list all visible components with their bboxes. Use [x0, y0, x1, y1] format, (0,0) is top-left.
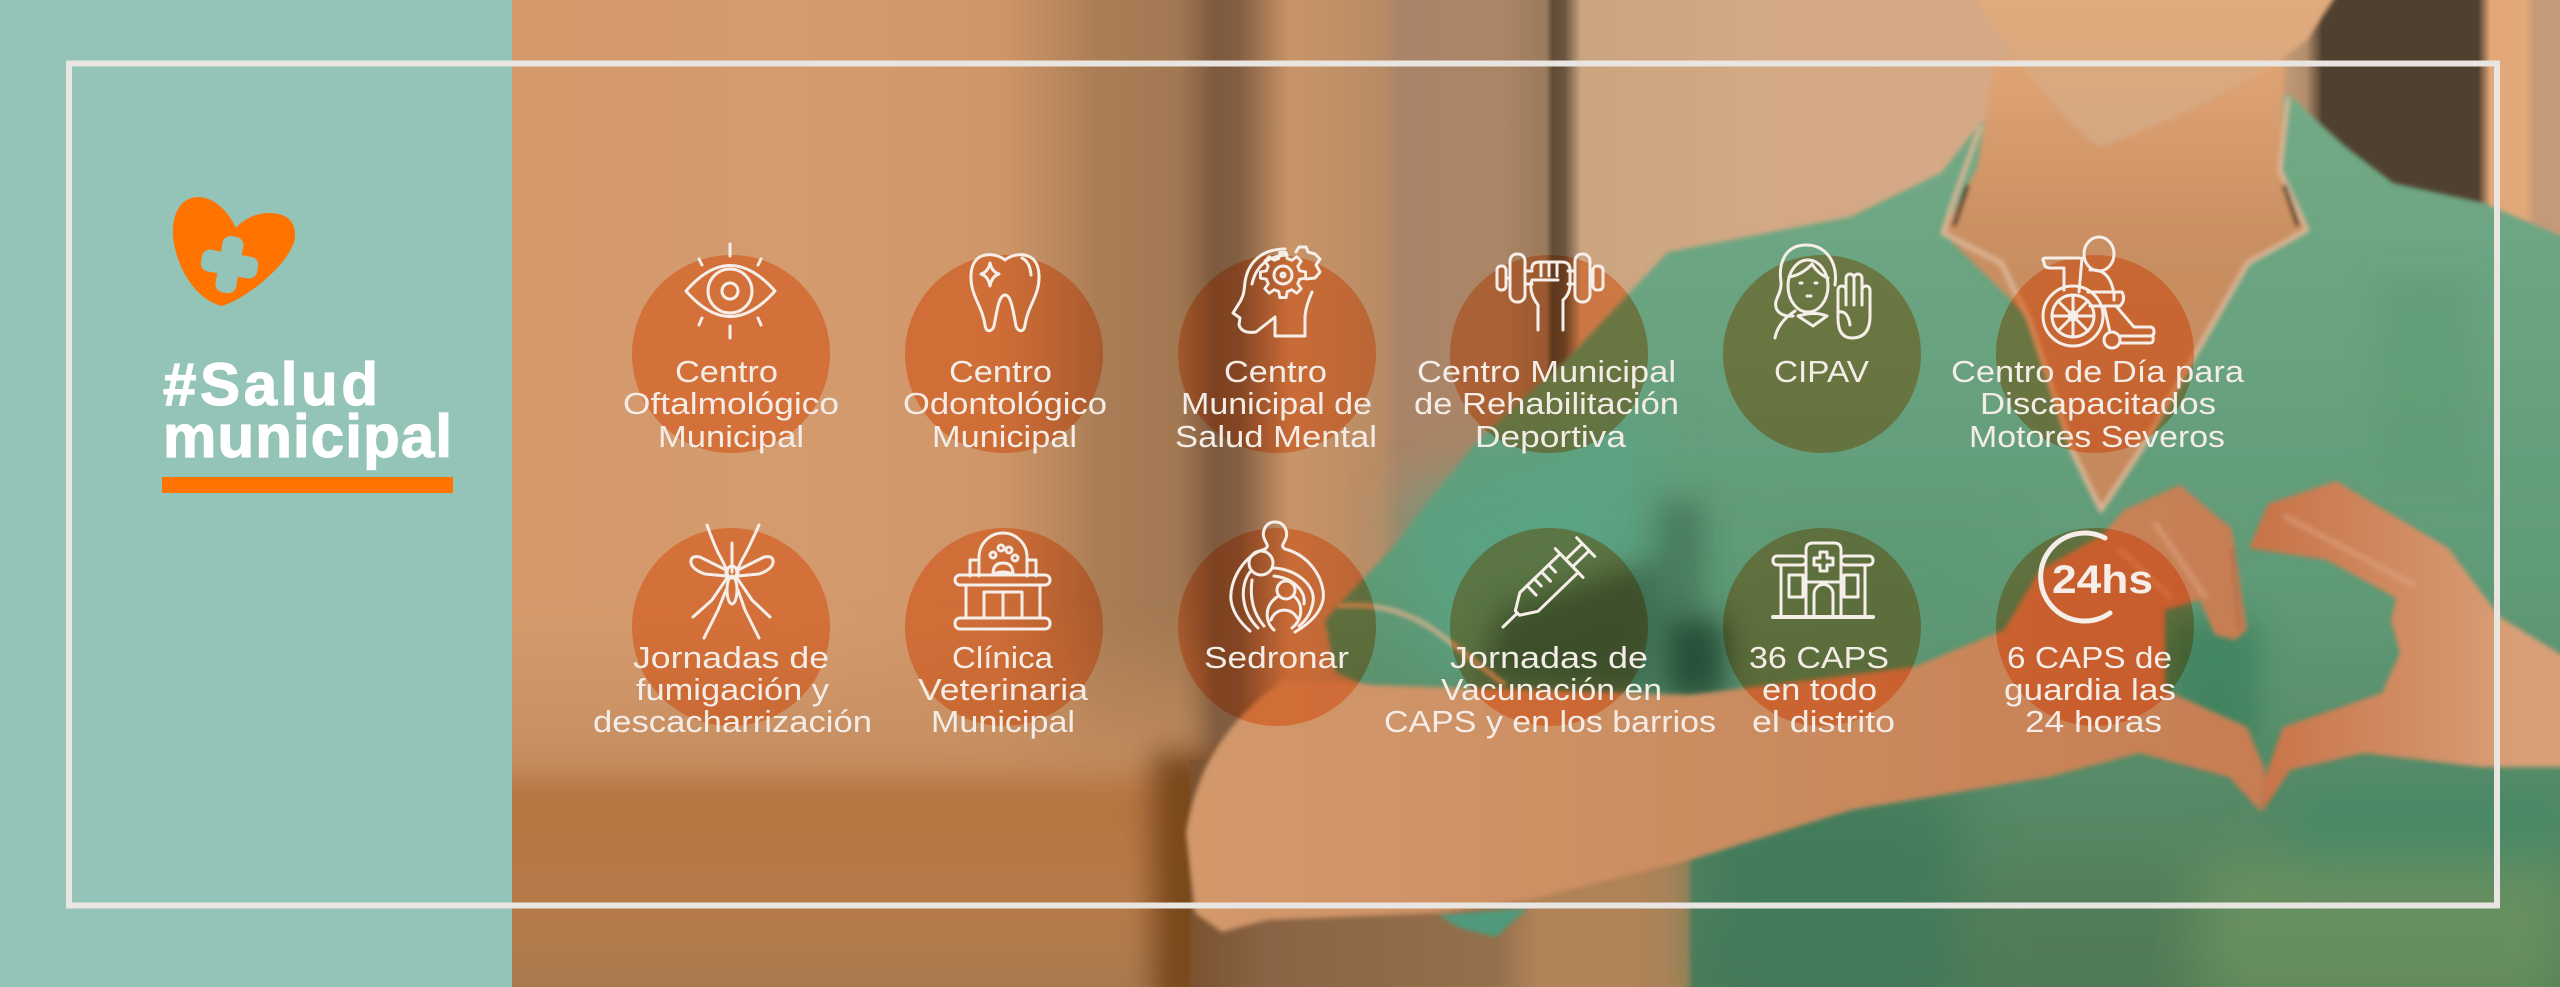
label: Municipal	[658, 419, 804, 454]
title: municipal	[163, 403, 452, 470]
icon: syringe	[1489, 533, 1600, 641]
label: Municipal	[931, 704, 1075, 739]
label: Odontológico	[903, 386, 1107, 421]
label: Municipal	[932, 419, 1077, 454]
title	[163, 351, 452, 470]
item: Centro Municipal de Rehabilitación Deportiva	[1414, 254, 1679, 454]
label: guardia las	[2004, 672, 2176, 707]
label	[1384, 640, 1716, 739]
label: de Rehabilitación	[1414, 386, 1679, 421]
item: Clínica Veterinaria Municipal	[918, 533, 1089, 739]
item: Centro Odontológico Municipal	[903, 255, 1107, 454]
collar piping	[1943, 97, 2307, 510]
label: Centro de Día para	[1951, 354, 2245, 389]
label	[1414, 354, 1679, 454]
icon: eye	[686, 244, 775, 338]
title: #Salud	[163, 351, 378, 418]
mask	[1970, 0, 2340, 147]
item: Jornadas de Vacunación en CAPS y en los barrios	[1384, 533, 1716, 739]
label: CIPAV	[1774, 354, 1869, 389]
icon: mosquito	[691, 525, 773, 638]
icon: hospital	[1773, 543, 1873, 617]
icon: 24hs clock ring	[2041, 533, 2153, 621]
left arm and hand	[1186, 485, 2265, 932]
label: 24 horas	[2025, 704, 2162, 739]
scrubs	[1325, 95, 2560, 987]
label: Centro	[675, 354, 778, 389]
item: Centro de Día para Discapacitados Motores Severos	[1951, 237, 2245, 454]
item: Jornadas de fumigación y descacharrización	[593, 525, 872, 739]
scrub folds and shading	[1400, 420, 2560, 987]
hem fragment	[1438, 908, 1528, 937]
item: Centro Municipal de Salud Mental	[1175, 247, 1377, 454]
title underline	[162, 477, 453, 493]
circles: translucent orange discs behind each service	[632, 255, 2194, 726]
label	[1951, 354, 2245, 454]
icon: person in wheelchair	[2043, 237, 2154, 348]
icon: tooth	[971, 255, 1039, 331]
label: Discapacitados	[1980, 386, 2216, 421]
label: Municipal de	[1181, 386, 1372, 421]
label: el distrito	[1752, 704, 1895, 739]
label: Jornadas de	[1450, 640, 1648, 675]
item: CIPAV	[1774, 245, 1870, 389]
icon: head with gears	[1233, 247, 1320, 336]
label: CAPS y en los barrios	[1384, 704, 1716, 739]
label: Centro	[949, 354, 1052, 389]
label: Oftalmológico	[623, 386, 839, 421]
label: en todo	[1762, 672, 1877, 707]
icon: veterinary clinic with paw	[955, 533, 1050, 629]
icon: woman with raised hand	[1775, 245, 1870, 338]
label	[623, 354, 839, 454]
label: Sedronar	[1204, 640, 1349, 675]
icon: fist with dumbbell	[1497, 254, 1603, 330]
label: Centro Municipal	[1417, 354, 1676, 389]
label	[2004, 640, 2176, 739]
item: Centro Oftalmológico Municipal	[623, 244, 839, 454]
label: Salud Mental	[1175, 419, 1377, 454]
label: 36 CAPS	[1749, 640, 1889, 675]
label: 6 CAPS de	[2007, 640, 2172, 675]
right hand	[2249, 481, 2560, 812]
label: fumigación y	[636, 672, 830, 707]
label	[1749, 640, 1895, 739]
label: Motores Severos	[1969, 419, 2225, 454]
item: Sedronar	[1204, 522, 1349, 675]
label: Deportiva	[1475, 419, 1627, 454]
label: descacharrización	[593, 704, 872, 739]
item: 6 CAPS de guardia las 24 horas	[2004, 533, 2176, 739]
label	[903, 354, 1107, 454]
label: Clínica	[952, 640, 1054, 675]
label: Veterinaria	[918, 672, 1089, 707]
logo: orange heart with cross	[173, 197, 295, 306]
neck and chest	[1943, 60, 2307, 510]
item: 36 CAPS en todo el distrito	[1749, 543, 1895, 739]
panel: teal sidebar	[0, 0, 512, 987]
cuff piping	[1338, 605, 1505, 685]
icon: nested family figures	[1231, 522, 1323, 632]
icon: 24hs clock ring: 24hs	[2052, 558, 2153, 602]
label	[1175, 354, 1377, 454]
label: Vacunación en	[1441, 672, 1662, 707]
label: Centro	[1224, 354, 1327, 389]
label	[918, 640, 1089, 739]
label: Jornadas de	[633, 640, 829, 675]
label	[593, 640, 872, 739]
